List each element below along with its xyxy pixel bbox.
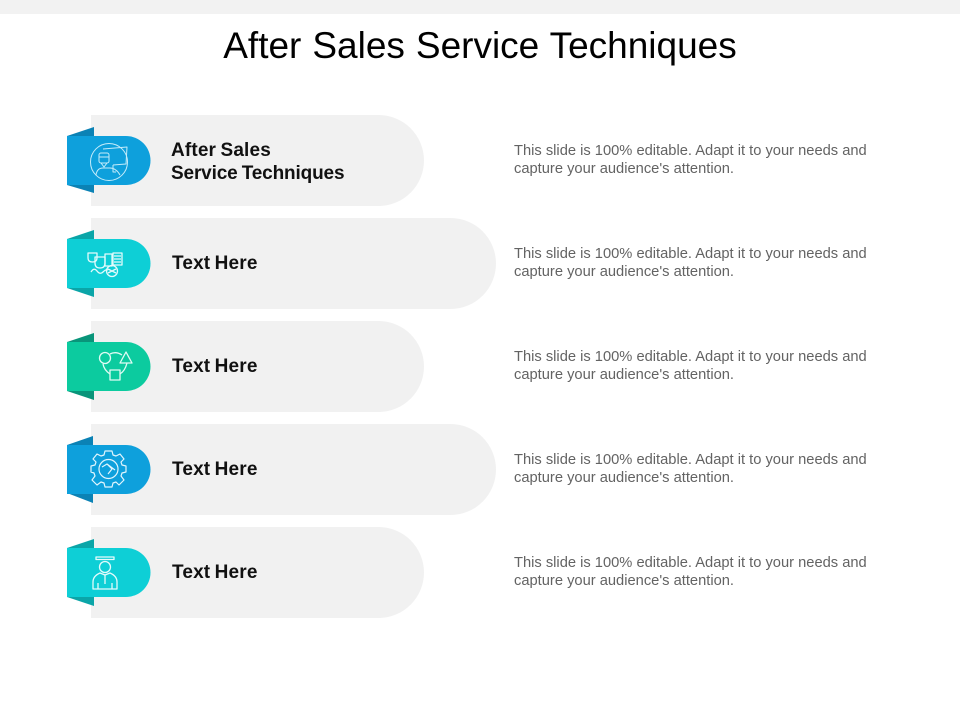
panel: row 2 background (91, 218, 496, 309)
panel: row 3 background (91, 321, 424, 412)
icon: presenter in circle (90, 144, 128, 180)
label: row 2: Text Here (172, 253, 258, 274)
description: row 4: This slide is 100% editable. Adapt it to your needs and (514, 452, 867, 468)
label: row 5: Text Here (172, 562, 258, 583)
description: row 2: This slide is 100% editable. Adapt it to your needs and (514, 246, 867, 262)
panel: row 4 background (91, 424, 496, 515)
description: row 4 (514, 452, 867, 486)
icon: gear with handshake (91, 451, 126, 487)
panel: row 1 background (91, 115, 424, 206)
description: row 5: capture your audience's attention. (514, 573, 734, 589)
ribbon tab: row 3 (67, 333, 150, 400)
description: row 2 (514, 246, 867, 280)
description: row 3 (514, 349, 867, 383)
label: row 1: Service Techniques (171, 163, 344, 184)
icon: circle, triangle and square (100, 352, 132, 380)
description: row 1: capture your audience's attention. (514, 161, 734, 177)
description: row 5: This slide is 100% editable. Adapt it to your needs and (514, 555, 867, 571)
label: row 1 (171, 140, 344, 184)
icon: service tools (88, 253, 122, 276)
label: row 4: Text Here (172, 459, 258, 480)
panel: row 5 background (91, 527, 424, 618)
description: row 3: capture your audience's attention. (514, 367, 734, 383)
description: row 3: This slide is 100% editable. Adapt it to your needs and (514, 349, 867, 365)
ribbon tab: row 2 (67, 230, 150, 297)
label: row 1: After Sales (171, 140, 271, 161)
title: After Sales Service Techniques (223, 25, 737, 66)
description: row 5 (514, 555, 867, 589)
description: row 1 (514, 143, 867, 177)
description: row 1: This slide is 100% editable. Adapt it to your needs and (514, 143, 867, 159)
ribbon tab: row 4 (67, 436, 150, 503)
description: row 4: capture your audience's attention. (514, 470, 734, 486)
label: row 3: Text Here (172, 356, 258, 377)
icon: person with bar (93, 557, 117, 589)
ribbon tab: row 1 (67, 127, 150, 193)
description: row 2: capture your audience's attention. (514, 264, 734, 280)
ribbon tab: row 5 (67, 539, 150, 606)
